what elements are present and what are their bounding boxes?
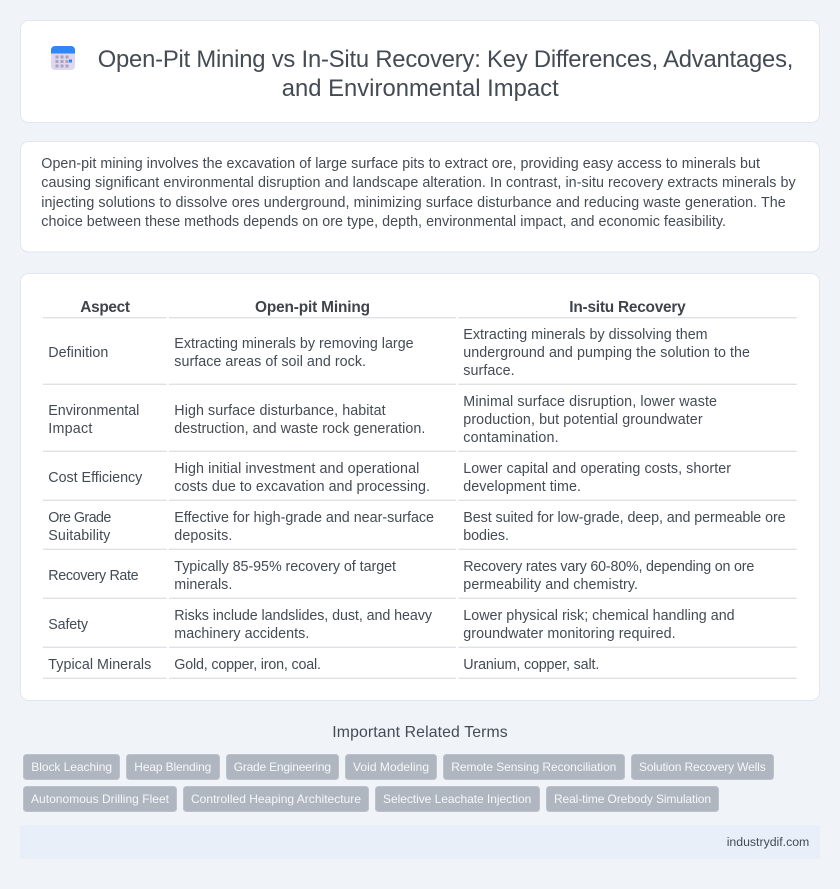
comparison table panel (20, 274, 820, 700)
title: and Environmental Impact (282, 75, 559, 102)
intro paragraph: choice between these methods depends on ore type, depth, environmental impact, and economic feasibility. (41, 214, 726, 230)
table header (80, 299, 686, 316)
footer bar (20, 825, 820, 859)
related terms tags: Controlled Heaping Architecture (191, 792, 361, 806)
row: environmental impact: Environmental (48, 403, 139, 419)
row: cost efficiency: Cost Efficiency (48, 470, 143, 486)
row: safety (48, 608, 735, 642)
row: safety: groundwater monitoring required. (463, 626, 676, 642)
related terms tags (24, 754, 774, 812)
related terms tags: Autonomous Drilling Fleet (31, 792, 170, 806)
related terms tags: Solution Recovery Wells (639, 760, 766, 774)
row: cost efficiency: costs due to excavation and processing. (174, 479, 430, 495)
row: environmental impact: Minimal surface disruption, lower waste (463, 394, 717, 410)
row: definition: Extracting minerals by removing large (174, 336, 414, 352)
row: cost efficiency: High initial investment and operational (174, 461, 419, 477)
row: ore grade suitability: deposits. (174, 528, 232, 544)
intro paragraph: Open-pit mining involves the excavation of large surface pits to extract ore, providing easy access to minerals but (41, 156, 760, 172)
row: environmental impact (48, 394, 717, 446)
row: environmental impact: Impact (48, 421, 92, 437)
row: environmental impact: production, but potential groundwater (463, 412, 703, 428)
row: definition: underground and pumping the solution to the (463, 345, 750, 361)
row: definition: surface areas of soil and rock. (174, 354, 366, 370)
row: environmental impact: High surface disturbance, habitat (174, 403, 386, 419)
row: safety: machinery accidents. (174, 626, 309, 642)
related terms tags: Selective Leachate Injection (383, 792, 531, 806)
related terms tags: Grade Engineering (234, 760, 331, 774)
row: cost efficiency (48, 461, 731, 495)
row: ore grade suitability: Ore Grade (48, 510, 111, 526)
row: safety: Risks include landslides, dust, and heavy (174, 608, 433, 624)
title (98, 46, 793, 102)
icon: calendar (51, 46, 75, 70)
intro paragraph: causing significant environmental disruption and landscape alteration. In contrast, in-situ recovery extracts minerals by (41, 175, 797, 191)
row: definition (48, 327, 750, 379)
row: typical minerals: Uranium, copper, salt. (463, 657, 599, 673)
row: typical minerals: Gold, copper, iron, coal. (174, 657, 321, 673)
row: environmental impact: destruction, and waste rock generation. (174, 421, 425, 437)
table header: In-situ Recovery (569, 299, 686, 316)
table header: Aspect (80, 299, 130, 316)
row: definition: Extracting minerals by dissolving them (463, 327, 708, 343)
row: environmental impact: contamination. (463, 430, 559, 446)
row: ore grade suitability: Effective for high-grade and near-surface (174, 510, 434, 526)
related terms tags: Block Leaching (31, 760, 112, 774)
row: recovery rate: Recovery rates vary 60-80%, depending on ore (463, 559, 754, 575)
row: ore grade suitability: bodies. (463, 528, 509, 544)
row: recovery rate (48, 559, 754, 593)
intro paragraph (41, 156, 797, 230)
row: definition: Definition (48, 345, 108, 361)
row: recovery rate: permeability and chemistry. (463, 577, 638, 593)
table header: Open-pit Mining (255, 299, 370, 316)
title: Open-Pit Mining vs In-Situ Recovery: Key Differences, Advantages, (98, 46, 793, 73)
header panel (20, 20, 820, 122)
footer source text: industrydif.com (727, 835, 809, 849)
related terms tags: Remote Sensing Reconciliation (451, 760, 616, 774)
row: ore grade suitability: Suitability (48, 528, 111, 544)
row: recovery rate: Recovery Rate (48, 568, 139, 584)
row: ore grade suitability: Best suited for low-grade, deep, and permeable ore (463, 510, 786, 526)
intro paragraph: injecting solutions to dissolve ores underground, minimizing surface disturbance and reducing waste generation. The (41, 195, 786, 211)
row: safety: Lower physical risk; chemical handling and (463, 608, 735, 624)
related terms heading: Important Related Terms (332, 724, 508, 741)
related terms tags: Void Modeling (353, 760, 429, 774)
row: ore grade suitability (48, 510, 786, 544)
row: recovery rate: minerals. (174, 577, 232, 593)
related terms tags: Heap Blending (134, 760, 211, 774)
row: definition: surface. (463, 363, 515, 379)
row: cost efficiency: development time. (463, 479, 581, 495)
row: recovery rate: Typically 85-95% recovery of target (174, 559, 396, 575)
row: typical minerals (48, 657, 599, 673)
row: cost efficiency: Lower capital and operating costs, shorter (463, 461, 731, 477)
related terms tags: Real-time Orebody Simulation (554, 792, 711, 806)
row: safety: Safety (48, 617, 89, 633)
intro text panel (20, 142, 820, 252)
row: typical minerals: Typical Minerals (48, 657, 151, 673)
